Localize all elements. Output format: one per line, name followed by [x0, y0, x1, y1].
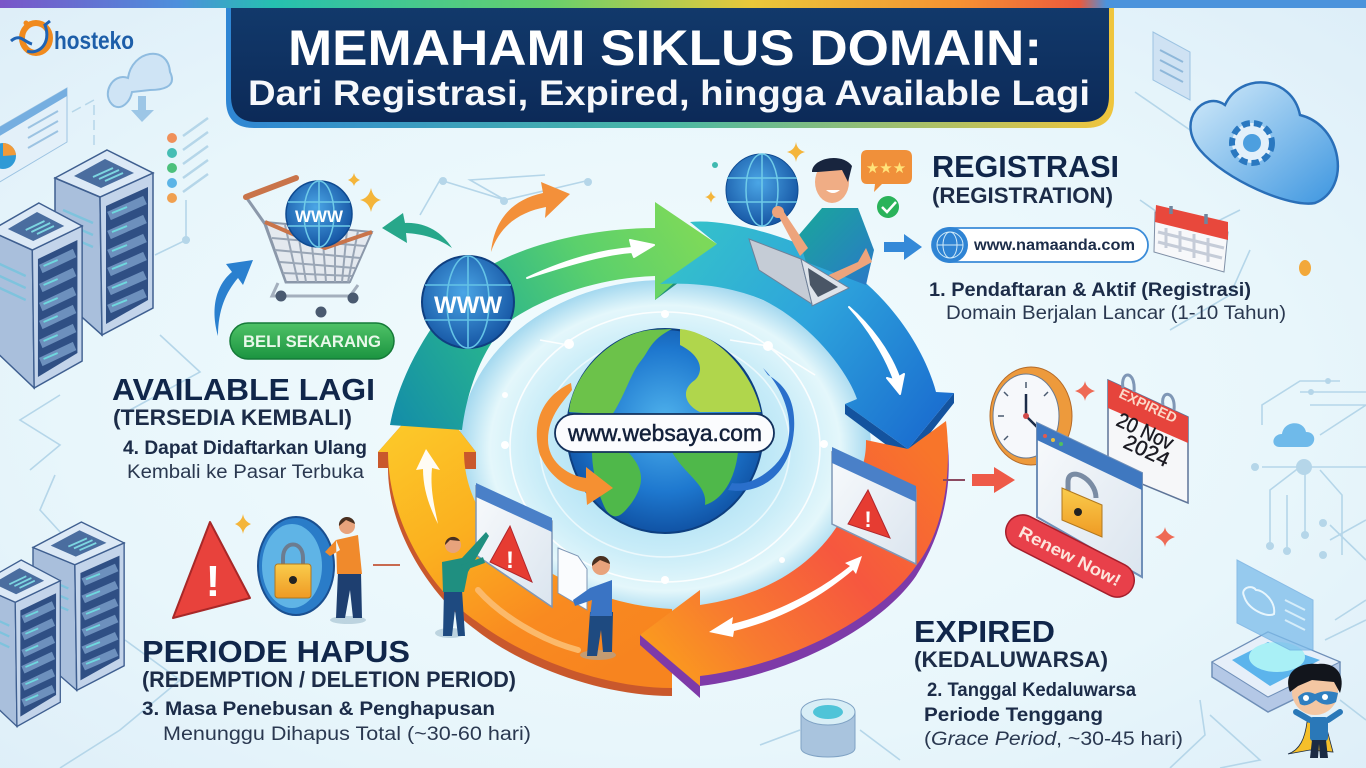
person with green shirt [435, 532, 489, 638]
warning window left: ! [506, 547, 514, 574]
segment: green arrow top-left [390, 202, 717, 430]
server towers top-left [0, 150, 153, 388]
renew now button [1000, 509, 1140, 603]
title banner [226, 0, 1114, 128]
lock badge [258, 517, 334, 615]
expired browser window with lock [1037, 423, 1142, 577]
calendar icon [1154, 205, 1228, 272]
globe icon [726, 154, 798, 226]
button: beli sekarang [230, 323, 394, 359]
sparkle near triangle [235, 514, 251, 534]
text: step 3 [142, 699, 531, 745]
shopping cart with www globe [246, 178, 372, 318]
segment: orange bottom to yellow head [378, 393, 672, 696]
padlock [1062, 474, 1102, 537]
renew now button: Renew Now! [1016, 523, 1124, 590]
segment: red arrow right-bottom [640, 421, 949, 698]
sparkles [705, 142, 805, 203]
text: step 2: 2. Tanggal Kedaluwarsa [927, 680, 1136, 701]
subheading: redemption: (REDEMPTION / DELETION PERIOD) [142, 667, 516, 692]
segment: blue arrow top-right [660, 222, 954, 461]
heading: periode hapus: PERIODE HAPUS [142, 634, 410, 669]
expired calendar [1108, 375, 1188, 503]
deletion warning triangle [173, 522, 250, 618]
orange dot [1299, 260, 1311, 276]
speech bubble with stars [861, 150, 912, 192]
logo: hosteko: hosteko [54, 27, 134, 55]
bottom-right holographic device [1212, 560, 1340, 712]
text: step 2 [924, 680, 1183, 750]
www globe in cart: WWW [295, 207, 344, 226]
red sparkles [1075, 381, 1175, 547]
document [558, 548, 587, 610]
subheading: tersedia kembali: (TERSEDIA KEMBALI) [113, 405, 352, 430]
arrow: blue curved to cart [215, 260, 253, 336]
arrow: green left [382, 213, 452, 248]
heading: registrasi: REGISTRASI [932, 149, 1119, 184]
registration icons [705, 142, 912, 306]
heading: expired: EXPIRED [914, 614, 1055, 649]
laptop [749, 239, 849, 306]
title line 1: MEMAHAMI SIKLUS DOMAIN: [288, 20, 1042, 76]
text: step 4: 4. Dapat Didaftarkan Ulang [123, 438, 367, 459]
url input pill [932, 227, 1148, 263]
arrow: blue to url pill [884, 234, 922, 260]
inner glow area [459, 280, 871, 616]
person with laptop [749, 158, 874, 306]
person with blue shirt [573, 556, 616, 660]
title line 2: Dari Registrasi, Expired, hingga Available Lagi [248, 74, 1090, 113]
expired calendar: EXPIRED [1117, 385, 1180, 426]
expired calendar: 20 Nov [1113, 409, 1177, 455]
expired calendar: 2024 [1120, 431, 1173, 472]
expired clock [990, 367, 1072, 465]
globe [567, 329, 763, 533]
warning window right: ! [864, 507, 872, 532]
url input pill: www.namaanda.com [973, 237, 1135, 254]
speech bubble with stars: ★★★ [866, 160, 906, 177]
arrow: red to expired [972, 467, 1015, 493]
button: beli sekarang: BELI SEKARANG [243, 332, 381, 351]
text: step 3: Menunggu Dihapus Total (~30-60 hari) [163, 724, 531, 745]
deletion warning triangle: ! [206, 557, 220, 606]
server towers bottom-left [0, 522, 124, 726]
warning window left [476, 483, 552, 607]
url pill [555, 414, 774, 452]
tablet panel top right [1153, 32, 1190, 100]
text: step 2: Periode Tenggang [924, 705, 1103, 726]
superhero mascot [1288, 664, 1342, 758]
text: step 1: Domain Berjalan Lancar (1-10 Tahun) [946, 303, 1286, 324]
database cylinder [801, 699, 855, 757]
small cloud right [1273, 423, 1314, 447]
subheading: registration: (REGISTRATION) [932, 183, 1113, 208]
sparkles near cart [348, 173, 381, 212]
url pill: www.websaya.com [567, 420, 762, 446]
connector line to expired [943, 479, 965, 481]
thin rings and nodes [510, 312, 820, 582]
big cloud with gear [1190, 82, 1338, 204]
small cloud with download arrow [72, 54, 172, 145]
subheading: kedaluwarsa: (KEDALUWARSA) [914, 647, 1108, 672]
heading: available lagi: AVAILABLE LAGI [112, 372, 375, 407]
text: step 1: 1. Pendaftaran & Aktif (Registrasi) [929, 280, 1251, 301]
top rainbow strip [0, 0, 1366, 8]
text: step 4 [123, 438, 367, 483]
text: step 2: (Grace Period , ~30-45 hari) [924, 729, 1183, 750]
www globe on ring [422, 256, 514, 348]
coloured status dots and list [167, 118, 208, 203]
www globe on ring: WWW [434, 292, 502, 319]
connector line to deletion [373, 564, 400, 566]
warning window right [832, 447, 916, 564]
text: step 1 [929, 280, 1286, 324]
person with orange shirt [325, 517, 366, 624]
text: step 3: 3. Masa Penebusan & Penghapusan [142, 699, 495, 720]
text: step 4: Kembali ke Pasar Terbuka [127, 462, 364, 483]
arrow: orange up-right [491, 182, 570, 252]
check badge [877, 196, 899, 218]
swoosh arrows around globe [537, 368, 794, 505]
top-left dashboard window [0, 88, 67, 183]
logo: hosteko [11, 20, 134, 55]
